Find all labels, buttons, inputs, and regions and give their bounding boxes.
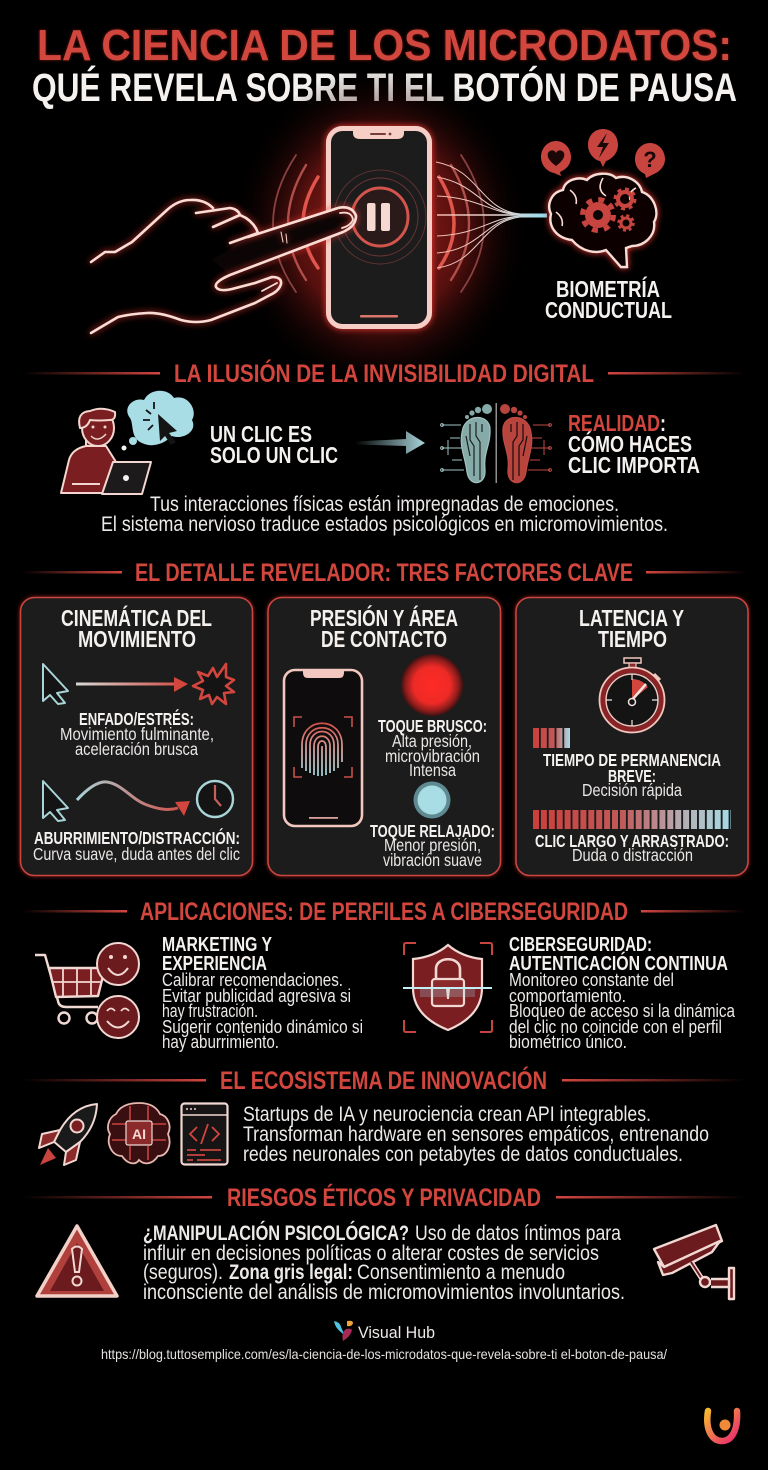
text: tiempo breve: TIEMPO DE PERMANENCIA bbox=[543, 750, 721, 770]
text: aburrimiento: Curva suave, duda antes del clic bbox=[33, 844, 240, 864]
panel heading bbox=[61, 604, 212, 652]
text: riesgos: Zona gris legal: bbox=[229, 1261, 353, 1284]
icon: rocket bbox=[39, 1104, 97, 1165]
text: marketing: hay frustración. bbox=[162, 1001, 258, 1021]
text: clic largo: Duda o distracción bbox=[572, 845, 693, 865]
text: riesgos: influir en decisiones políticas o alterar costes de servicios bbox=[143, 1242, 599, 1265]
icon: shield with lock bbox=[403, 943, 492, 1032]
icon: person with laptop bbox=[61, 409, 151, 494]
text: tiempo breve: Decisión rápida bbox=[582, 780, 682, 800]
panel heading: TIEMPO bbox=[598, 626, 667, 652]
panel heading bbox=[310, 604, 458, 652]
icon: AI brain bbox=[108, 1103, 170, 1163]
heading: riesgos: RIESGOS ÉTICOS Y PRIVACIDAD bbox=[227, 1183, 541, 1212]
text: realidad: CÓMO HACES bbox=[568, 430, 692, 457]
panel heading: LATENCIA Y bbox=[579, 605, 684, 631]
text: riesgos: ¿MANIPULACIÓN PSICOLÓGICA? bbox=[143, 1221, 409, 1245]
text block: emociones bbox=[101, 493, 668, 536]
text: marketing: Sugerir contenido dinámico si bbox=[162, 1017, 363, 1037]
icon: cursor and curve bbox=[43, 781, 233, 821]
panel: presión bbox=[268, 598, 500, 876]
text: realidad: : bbox=[660, 410, 666, 436]
text: toque brusco: Alta presión, bbox=[392, 731, 472, 751]
text: toque relajado: Menor presión, bbox=[384, 835, 481, 855]
icon: digital footprints bbox=[441, 403, 551, 483]
hand bbox=[91, 200, 356, 333]
arrow bbox=[355, 431, 425, 454]
text: toque relajado: vibración suave bbox=[383, 850, 482, 870]
text: toque relajado bbox=[370, 821, 495, 870]
text: ciberseguridad: del clic no coincide con el perfil bbox=[509, 1017, 722, 1037]
text: ciberseguridad: Monitoreo constante del bbox=[509, 970, 674, 990]
text: riesgos: inconsciente del análisis de micromovimientos involuntarios. bbox=[143, 1281, 625, 1304]
text: toque brusco bbox=[378, 716, 487, 780]
text: toque brusco: TOQUE BRUSCO: bbox=[378, 716, 487, 736]
icon: cart with smileys bbox=[35, 943, 139, 1038]
text block: emociones: El sistema nervioso traduce estados psicológicos en micromovimientos. bbox=[101, 513, 668, 536]
text: toque brusco: microvibración bbox=[385, 746, 480, 766]
logo: visual hub: Visual Hub bbox=[358, 1323, 435, 1342]
panel: latencia bbox=[516, 598, 748, 876]
text: marketing: hay aburrimiento. bbox=[162, 1032, 279, 1052]
text: clic largo bbox=[535, 831, 729, 865]
label: biometría conductual: CONDUCTUAL bbox=[545, 297, 672, 323]
text: marketing bbox=[162, 934, 363, 1052]
icon: cursor and explosion bbox=[43, 664, 234, 704]
text: toque relajado: TOQUE RELAJADO: bbox=[370, 821, 495, 841]
text: marketing: Evitar publicidad agresiva si bbox=[162, 986, 351, 1006]
logo: corner mark bbox=[707, 1411, 737, 1441]
title: LA CIENCIA DE LOS MICRODATOS: bbox=[37, 21, 732, 70]
icon: question bubble bbox=[635, 143, 665, 178]
pause button bbox=[334, 170, 426, 264]
icon: question bubble: ? bbox=[643, 147, 657, 172]
panel heading: MOVIMIENTO bbox=[78, 626, 196, 652]
chart: short dwell bar bbox=[533, 728, 570, 748]
logo: visual hub bbox=[334, 1321, 435, 1342]
source url: https://blog.tuttosemplice.com/es/la-ciencia-de-los-microdatos-que-revela-sobre-ti el-boton-de-pausa/ bbox=[101, 1346, 667, 1362]
text: riesgos: Uso de datos íntimos para bbox=[415, 1222, 621, 1245]
text: enfado: Movimiento fulminante, bbox=[60, 724, 214, 744]
text: un clic es: SOLO UN CLIC bbox=[210, 442, 338, 468]
text: startups: Startups de IA y neurociencia crean API integrables. bbox=[243, 1103, 651, 1126]
text: riesgos: Consentimiento a menudo bbox=[357, 1261, 565, 1284]
text: enfado: ENFADO/ESTRÉS: bbox=[79, 708, 194, 729]
heading: ecosistema: EL ECOSISTEMA DE INNOVACIÓN bbox=[220, 1065, 547, 1095]
text: marketing: MARKETING Y bbox=[162, 934, 273, 956]
icon: security camera bbox=[654, 1225, 734, 1299]
text: enfado bbox=[60, 708, 214, 759]
chart: long dwell bar bbox=[533, 810, 731, 829]
heading: el detalle revelador: EL DETALLE REVELADOR: TRES FACTORES CLAVE bbox=[135, 559, 633, 587]
text: realidad: CLIC IMPORTA bbox=[568, 452, 700, 478]
text block: emociones: Tus interacciones físicas están impregnadas de emociones. bbox=[150, 493, 619, 516]
text: marketing: EXPERIENCIA bbox=[162, 953, 267, 975]
hero illustration bbox=[91, 65, 672, 395]
text: ciberseguridad bbox=[509, 934, 736, 1052]
icon: warning triangle bbox=[37, 1226, 117, 1296]
text: aburrimiento bbox=[33, 827, 240, 864]
text: un clic es: UN CLIC ES bbox=[210, 421, 312, 447]
icon: phone fingerprint bbox=[284, 670, 362, 826]
icon: code window bbox=[182, 1104, 228, 1164]
text: toque brusco: Intensa bbox=[409, 760, 456, 780]
panel: illusion bbox=[61, 391, 700, 536]
text: tiempo breve: BREVE: bbox=[608, 766, 656, 786]
icon: stopwatch bbox=[600, 658, 664, 732]
text: marketing: Calibrar recomendaciones. bbox=[162, 970, 343, 990]
phone bbox=[328, 128, 430, 326]
label: biometría conductual bbox=[545, 275, 672, 323]
panel: cinemática bbox=[20, 598, 252, 876]
icon: hard touch bbox=[401, 654, 463, 716]
icon: brain with gears bbox=[549, 174, 656, 267]
title bbox=[32, 21, 737, 110]
icon: bolt bubble bbox=[588, 129, 618, 167]
text: ciberseguridad: CIBERSEGURIDAD: bbox=[509, 934, 652, 956]
panel heading: DE CONTACTO bbox=[321, 626, 447, 652]
icon: heart bubble bbox=[541, 141, 571, 176]
panel heading: PRESIÓN Y ÁREA bbox=[310, 604, 458, 631]
text: startups bbox=[243, 1103, 709, 1166]
signal lines to brain bbox=[436, 162, 547, 268]
heading: aplicaciones: APLICACIONES: DE PERFILES A CIBERSEGURIDAD bbox=[140, 898, 628, 926]
text: aburrimiento: ABURRIMIENTO/DISTRACCIÓN: bbox=[34, 827, 240, 848]
text: riesgos: (seguros). bbox=[143, 1261, 223, 1284]
icon: AI brain: AI bbox=[132, 1126, 146, 1142]
text: startups: redes neuronales con petabytes de datos conductuales. bbox=[243, 1143, 683, 1166]
text: riesgos bbox=[143, 1221, 625, 1304]
heading: la ilusión: LA ILUSIÓN DE LA INVISIBILIDAD DIGITAL bbox=[174, 358, 594, 388]
text: ciberseguridad: biométrico único. bbox=[509, 1032, 627, 1052]
text: realidad bbox=[568, 410, 700, 478]
text: realidad: REALIDAD bbox=[568, 410, 660, 436]
text: un clic es bbox=[210, 421, 338, 468]
panel heading: CINEMÁTICA DEL bbox=[61, 604, 212, 631]
vibration arcs bbox=[273, 155, 484, 292]
text: tiempo breve bbox=[543, 750, 721, 800]
panel heading bbox=[579, 605, 684, 652]
icon: thought cloud with cursor bbox=[122, 391, 194, 450]
label: biometría conductual: BIOMETRÍA bbox=[556, 275, 660, 302]
text: ciberseguridad: comportamiento. bbox=[509, 986, 626, 1006]
icon: soft touch bbox=[414, 782, 450, 818]
text: enfado: aceleración brusca bbox=[75, 739, 198, 759]
